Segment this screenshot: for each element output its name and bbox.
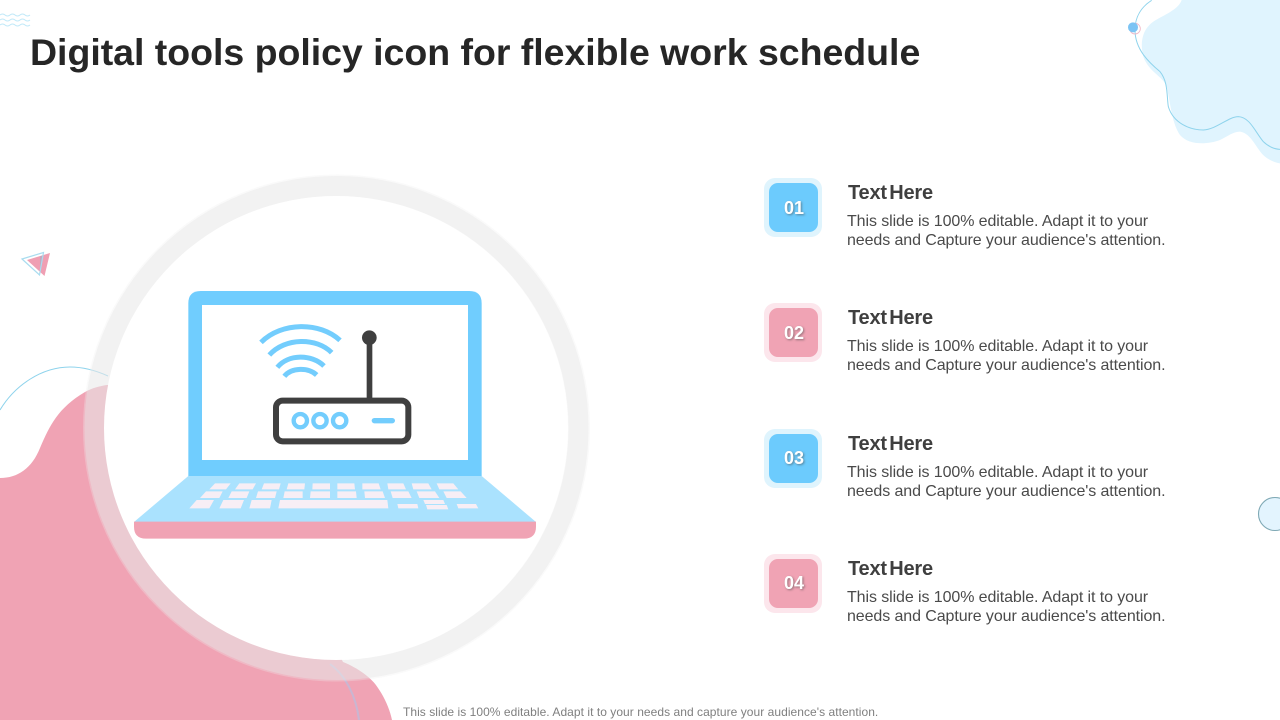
body 04: needs and Capture your audience's attention. — [847, 608, 1165, 625]
decorative triangles: left — [22, 252, 50, 276]
decorative waves: top left — [0, 14, 30, 26]
heading 04: Text Here — [848, 558, 933, 580]
item 04 — [764, 554, 1165, 625]
laptop front edge — [134, 522, 536, 539]
badge 03 — [764, 429, 822, 488]
decorative circle: right edge — [1258, 498, 1280, 530]
heading 02: Text Here — [848, 306, 933, 328]
laptop base — [134, 476, 536, 522]
decorative arc lines — [0, 367, 359, 720]
router — [276, 330, 408, 441]
body 01: needs and Capture your audience's attention. — [847, 232, 1165, 249]
badge 03: 03 — [784, 448, 804, 468]
badge 01 — [764, 178, 822, 237]
title: Digital tools policy icon for flexible work schedule — [30, 31, 920, 73]
heading 01: Text Here — [848, 182, 933, 204]
magnifier ring — [94, 186, 578, 670]
body 02: needs and Capture your audience's attention. — [847, 357, 1165, 374]
footer note: This slide is 100% editable. Adapt it to your needs and capture your audience's attention. — [403, 705, 878, 719]
decorative blob: bottom left pink — [0, 385, 392, 720]
badge 02: 02 — [784, 323, 804, 343]
item 01 — [764, 178, 1165, 249]
body 02 — [847, 338, 1165, 374]
heading 03: Text Here — [848, 432, 933, 454]
icon: laptop with wifi router — [134, 291, 536, 539]
decorative blob: top right — [1128, 0, 1280, 163]
body 01: This slide is 100% editable. Adapt it to your — [847, 213, 1148, 230]
badge 04 — [764, 554, 822, 613]
keyboard — [189, 483, 478, 509]
body 04: This slide is 100% editable. Adapt it to your — [847, 589, 1148, 606]
body 02: This slide is 100% editable. Adapt it to your — [847, 338, 1148, 355]
item 02 — [764, 303, 1165, 374]
body 04 — [847, 589, 1165, 625]
badge 01: 01 — [784, 198, 804, 218]
body 03: needs and Capture your audience's attention. — [847, 483, 1165, 500]
body 03 — [847, 464, 1165, 500]
body 01 — [847, 213, 1165, 249]
body 03: This slide is 100% editable. Adapt it to your — [847, 464, 1148, 481]
item 03 — [764, 429, 1165, 500]
wifi symbol — [261, 327, 340, 376]
badge 02 — [764, 303, 822, 362]
laptop bezel — [188, 291, 482, 476]
badge 04: 04 — [784, 573, 804, 593]
